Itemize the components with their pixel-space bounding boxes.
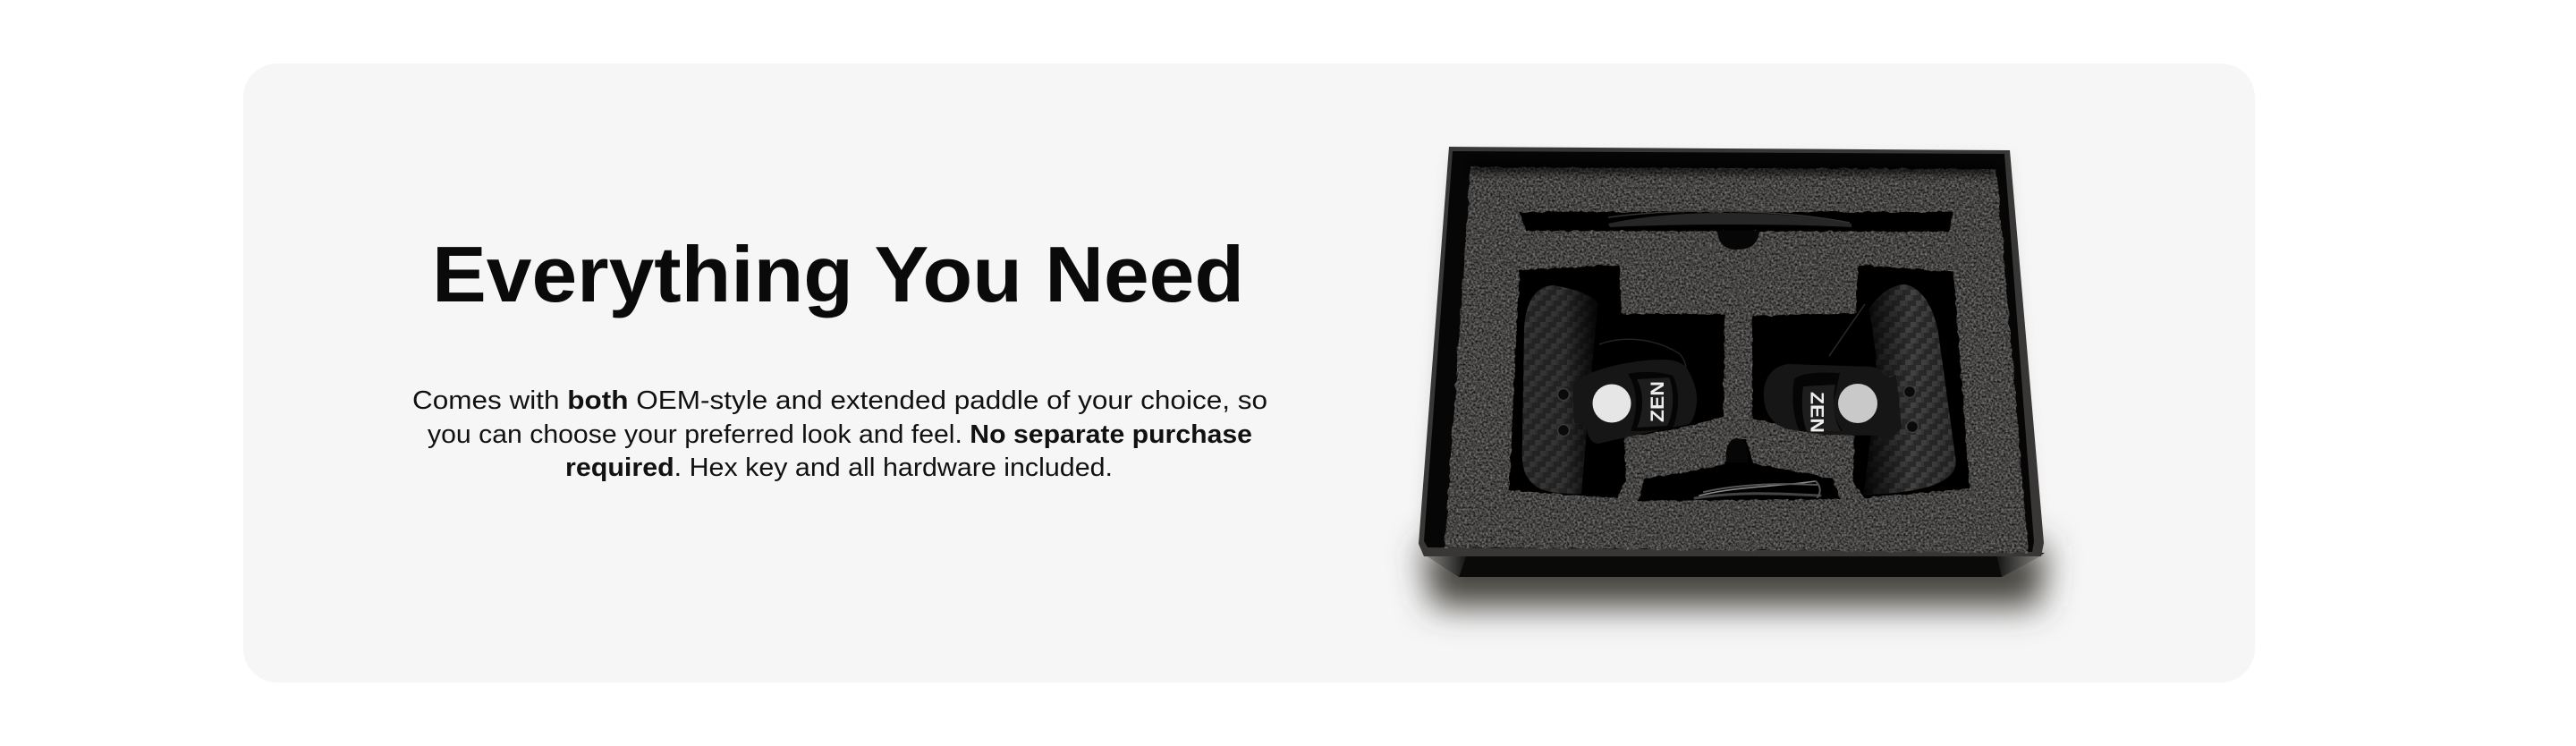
left magnet disc — [1592, 385, 1631, 422]
box lid rim — [1419, 147, 2044, 556]
paddle: left carbon fibre — [1522, 285, 1597, 494]
cavity: left paddle — [1509, 265, 1724, 498]
product photo: open box with paddles — [1418, 147, 2046, 606]
box front wall — [1422, 553, 2045, 577]
cable bundle — [1695, 481, 1820, 498]
finger notch: top — [1717, 231, 1759, 250]
left screws — [1558, 388, 1569, 437]
paddle: right carbon fibre — [1864, 284, 1956, 495]
cavity: bottom hardware — [1638, 439, 1841, 501]
line 1: Comes with both OEM-style and extended paddle of your choice, so — [412, 386, 1267, 415]
cavity: right paddle — [1752, 265, 1970, 498]
foam top edge shading — [1470, 162, 1997, 175]
right magnet disc — [1838, 384, 1877, 423]
right screws — [1903, 386, 1918, 433]
right paddle logo: ZEN — [1807, 392, 1826, 433]
box inner wall — [1424, 151, 2034, 552]
slot: hex key — [1520, 211, 1953, 232]
title: Everything You Need — [432, 230, 1244, 318]
box drop shadow — [1418, 157, 2046, 606]
left paddle logo: ZEN — [1648, 381, 1668, 422]
right mount — [1764, 304, 1902, 440]
foam insert — [1445, 167, 2029, 553]
line 3: required . Hex key and all hardware included. — [565, 454, 1113, 482]
panel: background card — [243, 64, 2255, 682]
text block: description — [412, 386, 1267, 482]
finger notch: lower — [1726, 438, 1748, 462]
line 2: you can choose your preferred look and feel. No separate purchase — [428, 420, 1252, 449]
left mount — [1572, 339, 1697, 444]
